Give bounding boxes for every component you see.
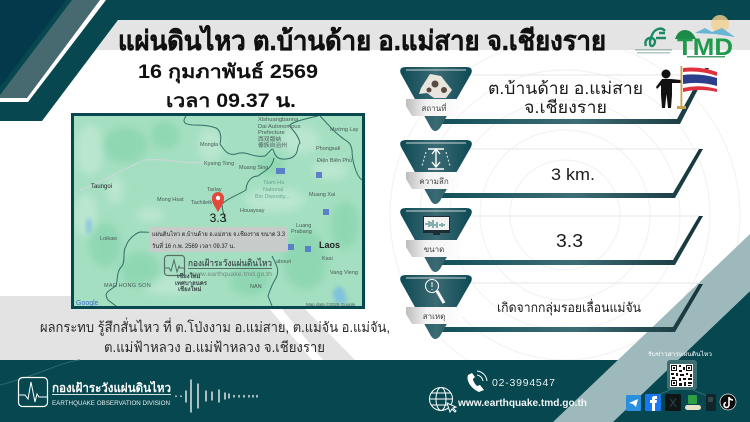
map labels: Bio Diversity... bbox=[255, 194, 290, 200]
map labels: Tarlay bbox=[207, 187, 222, 193]
map marker pin with magnitude: 3.3 bbox=[210, 211, 227, 225]
location value panel bbox=[442, 68, 709, 124]
map marker pin with magnitude bbox=[210, 192, 227, 225]
lower grey background band bbox=[0, 296, 355, 360]
map labels: Mường Lay bbox=[330, 127, 359, 133]
map labels: Mongla bbox=[200, 142, 219, 148]
map labels: abouri bbox=[276, 259, 291, 265]
map Thai labels: เชียงใหม่ bbox=[178, 285, 201, 293]
map labels: Kasi bbox=[322, 256, 333, 262]
impact text bbox=[40, 318, 390, 355]
map labels bbox=[76, 117, 359, 307]
icon: mobile app bbox=[706, 394, 716, 411]
map labels: Vang Vieng bbox=[330, 270, 358, 276]
row: depth bbox=[400, 140, 703, 204]
icon: telegram bbox=[626, 395, 641, 411]
map watermark logo: กองเฝ้าระวังแผ่นดินไหว bbox=[188, 257, 272, 268]
map caption box bbox=[149, 227, 288, 252]
map labels: Mong Hsat bbox=[157, 197, 184, 203]
depth badge: ความลึก bbox=[419, 177, 449, 186]
cause value panel bbox=[442, 283, 703, 332]
map labels: Laos bbox=[319, 240, 340, 250]
logos: partner and TMD bbox=[635, 15, 735, 61]
map Thai labels: เชียงใหม่ bbox=[177, 272, 200, 280]
header band bbox=[96, 0, 750, 50]
impact text: ผลกระทบ รู้สึกสั่นไหว ที่ ต.โป่งงาม อ.แม่สาย, ต.แม่จัน อ.แม่จัน, bbox=[40, 318, 390, 336]
map Thai labels bbox=[175, 272, 208, 293]
header corner chevrons bbox=[0, 0, 118, 121]
division name Thai: กองเฝ้าระวังแผ่นดินไหว bbox=[52, 380, 171, 395]
map labels: Tachileik bbox=[191, 200, 212, 206]
icon: globe bbox=[430, 388, 456, 412]
map labels: Prefecture bbox=[258, 130, 285, 136]
icon: seismograph bbox=[18, 378, 48, 406]
follow news label: รับข่าวสารแผ่นดินไหว bbox=[648, 350, 712, 358]
row: magnitude bbox=[400, 208, 703, 272]
map labels: Phongsali bbox=[316, 146, 340, 152]
depth value: 3 km. bbox=[551, 166, 595, 184]
map labels: Điện Biên Phủ bbox=[317, 157, 352, 164]
depth badge bbox=[400, 140, 472, 204]
depth value panel bbox=[442, 149, 703, 198]
map labels: 傣族自治州 bbox=[258, 141, 287, 149]
waveform bbox=[176, 380, 257, 412]
magnitude badge bbox=[400, 208, 472, 272]
page background: concentric rings bbox=[390, 40, 740, 390]
division name English: EARTHQUAKE OBSERVATION DIVISION bbox=[52, 401, 170, 407]
map labels: Luang bbox=[296, 223, 311, 229]
map caption box: แผ่นดินไหว ต.บ้านด้าย อ.แม่สาย จ.เชียงราย ขนาด 3.3 bbox=[152, 230, 286, 238]
magnitude value: 3.3 bbox=[556, 230, 583, 251]
map labels: Map data ©2026 Google bbox=[306, 301, 356, 307]
phone contact: 02-3994547 bbox=[492, 377, 555, 389]
website contact: www.earthquake.tmd.go.th bbox=[457, 398, 587, 409]
magnitude value panel bbox=[442, 216, 703, 265]
footer division logo bbox=[18, 378, 257, 412]
map watermark logo bbox=[164, 256, 272, 278]
map labels: Google bbox=[76, 300, 99, 307]
map labels: MAE HONG SON bbox=[104, 283, 151, 289]
map labels: Taungoi bbox=[91, 184, 112, 190]
map labels: National bbox=[263, 187, 283, 193]
map labels: Muang Xai bbox=[309, 192, 335, 198]
map labels: Kyaing Tong bbox=[204, 161, 234, 167]
map labels: Dai Autonomous bbox=[258, 124, 301, 130]
icon: X: X bbox=[669, 396, 677, 410]
location badge bbox=[400, 67, 472, 131]
map labels: Prabang bbox=[291, 229, 312, 235]
map borders bbox=[106, 116, 362, 306]
map Thai labels: เทศบาลนคร bbox=[175, 280, 208, 287]
QR code bbox=[650, 360, 712, 398]
map labels: Loikaw bbox=[100, 236, 117, 242]
map labels: Houaysay bbox=[240, 208, 265, 214]
map caption box: วันที่ 16 ก.พ. 2569 เวลา 09.37 น. bbox=[152, 242, 235, 250]
location text bbox=[488, 79, 643, 117]
website contact bbox=[430, 388, 587, 412]
title: แผ่นดินไหว ต.บ้านด้าย อ.แม่สาย จ.เชียงราย bbox=[118, 25, 606, 56]
location text: จ.เชียงราย bbox=[524, 98, 607, 117]
map watermark logo: www.earthquake.tmd.go.th bbox=[190, 271, 272, 278]
time: เวลา 09.37 น. bbox=[166, 91, 296, 112]
phone contact bbox=[467, 371, 555, 392]
footer band bbox=[0, 360, 750, 422]
cause badge bbox=[400, 275, 472, 339]
map terrain bbox=[74, 121, 359, 304]
icon: LINE style badge bbox=[685, 395, 701, 410]
magnitude badge: ขนาด bbox=[424, 245, 444, 254]
map panel bbox=[72, 114, 364, 308]
location badge: สถานที่ bbox=[422, 102, 446, 113]
icon: person with Thai flag bbox=[656, 66, 717, 109]
map labels: Nam Ha bbox=[264, 180, 285, 186]
footer diagonal accent bbox=[553, 234, 750, 422]
cause text: เกิดจากกลุ่มรอยเลื่อนแม่จัน bbox=[497, 299, 641, 316]
date: 16 กุมภาพันธ์ 2569 bbox=[138, 61, 318, 84]
icon: phone bbox=[467, 373, 484, 392]
cause badge: สาเหตุ bbox=[423, 312, 445, 321]
social icons bbox=[626, 394, 736, 411]
map labels: Muang Sing bbox=[239, 165, 268, 171]
logos: partner and TMD: TMD bbox=[677, 34, 733, 61]
map labels: 西双版纳 bbox=[258, 135, 281, 143]
map labels: NAN bbox=[250, 284, 262, 290]
row: location bbox=[400, 66, 717, 131]
impact text: ต.แม่ฟ้าหลวง อ.แม่ฟ้าหลวง จ.เชียงราย bbox=[104, 339, 325, 355]
map labels: Xishuangbanna bbox=[258, 117, 299, 123]
row: cause bbox=[400, 275, 703, 339]
icon: facebook bbox=[645, 394, 661, 411]
icon: tiktok bbox=[720, 394, 736, 410]
location text: ต.บ้านด้าย อ.แม่สาย bbox=[488, 79, 643, 98]
